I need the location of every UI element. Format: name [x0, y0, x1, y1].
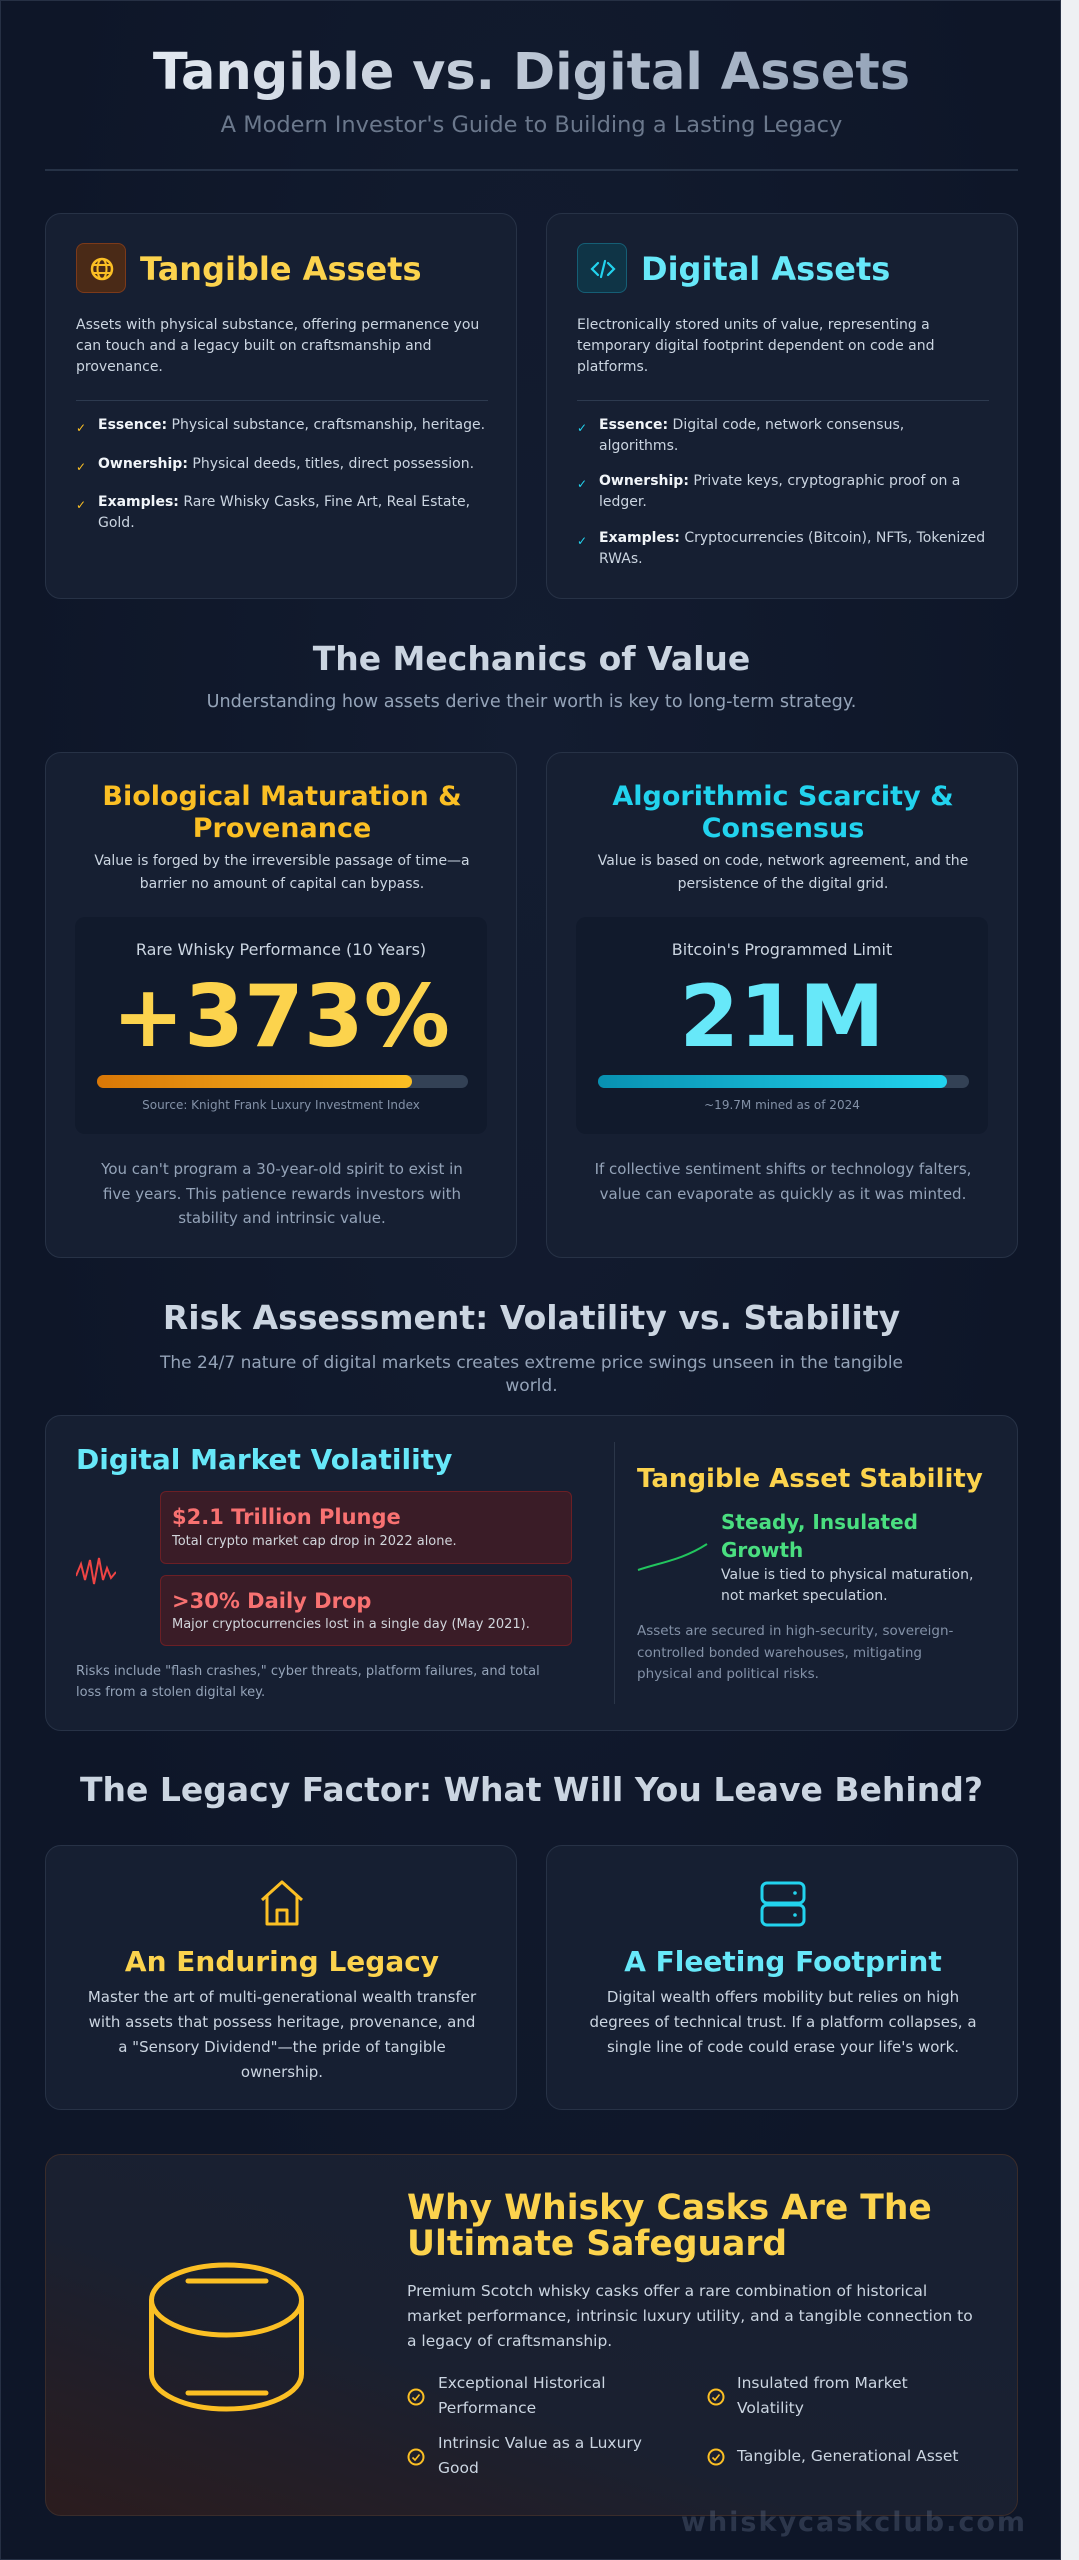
security text: controlled bonded warehouses, mitigating: [637, 1644, 922, 1660]
stat box: +373%: Source: Knight Frank Luxury Investment Index: [142, 1098, 420, 1112]
item: luxury good: Good: [438, 2459, 479, 2477]
bullet: essence: algorithms.: [599, 438, 678, 454]
progress bar: [598, 1075, 969, 1088]
description: persistence of the digital grid.: [678, 876, 888, 892]
item: luxury good: [408, 2434, 642, 2477]
security text: [637, 1623, 953, 1682]
description: Value is based on code, network agreement, and the: [598, 853, 968, 869]
bullet: examples: ✓: [76, 498, 86, 512]
icon: code: [577, 243, 627, 293]
description: Value is forged by the irreversible passage of time—a: [94, 853, 470, 869]
icon: house: [261, 1880, 303, 1926]
progress bar: [97, 1075, 468, 1088]
watermark: whiskycaskclub.com: [681, 2507, 1027, 2538]
bullet: ownership: ✓: [577, 477, 587, 491]
checklist: [408, 2374, 958, 2477]
heading: An Enduring Legacy: [125, 1945, 439, 1978]
heading: A Fleeting Footprint: [624, 1945, 942, 1978]
description: Assets with physical substance, offering permanence you can touch and a legacy built on craftsmanship and provenance.: [76, 317, 479, 375]
panel: digital assets: [546, 213, 1018, 599]
heading: Consensus: [702, 813, 864, 844]
item: insulated: Volatility: [737, 2399, 804, 2417]
panel: why whisky casks: [45, 2154, 1018, 2516]
heading: [407, 2188, 932, 2264]
panel: biological maturation: [45, 752, 517, 1258]
stat: daily drop: [160, 1575, 572, 1646]
title: Tangible vs. Digital Assets: [153, 43, 910, 102]
description: Electronically stored units of value, representing a temporary digital footprint dependent on code and platforms.: [577, 317, 934, 375]
heading: [612, 781, 954, 844]
bullet: essence: Essence: Physical substance, craftsmanship, heritage.: [98, 417, 485, 433]
stat box: +373%: [75, 917, 487, 1134]
panel: risk: [45, 1415, 1018, 1731]
text: single line of code could erase your life's work.: [607, 2038, 959, 2056]
heading: risk: Risk Assessment: Volatility vs. Stability: [163, 1298, 900, 1337]
text: [88, 1988, 476, 2081]
text: degrees of technical trust. If a platform collapses, a: [589, 2013, 977, 2031]
item: historical performance: Exceptional Historical: [438, 2374, 606, 2392]
text: ownership.: [241, 2063, 323, 2081]
risks text: loss from a stolen digital key.: [76, 1685, 265, 1700]
heading: volatility: Digital Market Volatility: [76, 1443, 452, 1476]
growth title: Growth: [721, 1538, 803, 1562]
bullet: essence: Essence: Digital code, network consensus,: [599, 417, 904, 433]
heading: Provenance: [193, 813, 371, 844]
panel: algorithmic scarcity: [546, 752, 1018, 1258]
icon: cask: [149, 2262, 304, 2412]
subheading: risk: [160, 1353, 903, 1396]
stat box: 21M: 21M: [679, 967, 885, 1067]
security text: Assets are secured in high-security, sovereign-: [637, 1623, 953, 1639]
text: [589, 1988, 977, 2056]
icon: globe: [76, 243, 126, 293]
subheading: mechanics: Understanding how assets derive their worth is key to long-term strategy.: [207, 692, 856, 712]
stat box: +373%: +373%: [112, 967, 450, 1067]
growth title: [721, 1510, 918, 1562]
heading: [102, 781, 462, 844]
panel: fleeting footprint: [546, 1845, 1018, 2110]
stat: plunge: [160, 1491, 572, 1564]
subheading: risk: The 24/7 nature of digital markets creates extreme price swings unseen in the tangible: [160, 1353, 903, 1373]
panel: enduring legacy: [45, 1845, 517, 2110]
bullet: essence: [577, 417, 904, 454]
stat: plunge: Total crypto market cap drop in 2022 alone.: [172, 1534, 457, 1549]
description: Premium Scotch whisky casks offer a rare combination of historical market performance, intrinsic luxury utility, and a tangible connection to a legacy of craftsmanship.: [407, 2282, 973, 2350]
footer text: value can evaporate as quickly as it was minted.: [600, 1184, 966, 1202]
footer text: [595, 1160, 971, 1202]
icon: server: [760, 1882, 806, 1926]
stat: plunge: $2.1 Trillion Plunge: [172, 1505, 401, 1529]
subtitle: A Modern Investor's Guide to Building a Lasting Legacy: [221, 112, 842, 138]
text: Master the art of multi-generational wealth transfer: [88, 1988, 476, 2006]
growth text: Value is tied to physical maturation, not market speculation.: [721, 1567, 973, 1604]
bullet: ownership: Ownership: Private keys, cryptographic proof on a ledger.: [599, 473, 960, 510]
footer text: stability and intrinsic value.: [178, 1209, 386, 1227]
bullet: ownership: Ownership: Physical deeds, titles, direct possession.: [98, 456, 474, 472]
stat box: +373%: Rare Whisky Performance (10 Years): [136, 940, 426, 959]
item: insulated: [708, 2374, 908, 2417]
footer text: [101, 1160, 463, 1227]
risks text: [76, 1664, 540, 1700]
footer text: You can't program a 30-year-old spirit to exist in: [101, 1160, 463, 1178]
text: Digital wealth offers mobility but relies on high: [607, 1988, 959, 2006]
stat box: 21M: [576, 917, 988, 1134]
item: historical performance: [408, 2374, 606, 2417]
description: barrier no amount of capital can bypass.: [140, 876, 424, 892]
item: generational asset: Tangible, Generational Asset: [737, 2447, 958, 2465]
item: historical performance: Performance: [438, 2399, 536, 2417]
heading: Digital Assets: [641, 250, 890, 288]
bullet: ownership: ✓: [76, 460, 86, 474]
heading: legacy: The Legacy Factor: What Will You Leave Behind?: [80, 1770, 983, 1809]
heading: Biological Maturation &: [102, 781, 462, 812]
growth title: Steady, Insulated: [721, 1510, 918, 1534]
heading: Algorithmic Scarcity &: [612, 781, 954, 812]
security text: physical and political risks.: [637, 1666, 819, 1682]
stat: daily drop: Major cryptocurrencies lost in a single day (May 2021).: [172, 1617, 530, 1632]
footer text: five years. This patience rewards investors with: [103, 1184, 461, 1202]
panel: tangible assets: [45, 213, 517, 599]
description: [94, 853, 470, 892]
bullet: examples: Examples: Rare Whisky Casks, Fine Art, Real Estate, Gold.: [98, 494, 470, 531]
bullet: essence: ✓: [577, 421, 587, 435]
icon: volatility wave: [76, 1558, 116, 1584]
icon: growth line: [638, 1543, 708, 1571]
heading: Tangible Assets: [140, 250, 422, 288]
subheading: risk: world.: [505, 1376, 558, 1396]
heading: mechanics: The Mechanics of Value: [313, 639, 750, 678]
footer text: If collective sentiment shifts or technology falters,: [595, 1160, 971, 1178]
bullet: examples: ✓: [577, 534, 587, 548]
risks text: Risks include "flash crashes," cyber threats, platform failures, and total: [76, 1664, 540, 1679]
heading: Ultimate Safeguard: [407, 2224, 787, 2264]
text: with assets that possess heritage, provenance, and: [89, 2013, 475, 2031]
item: luxury good: Intrinsic Value as a Luxury: [438, 2434, 642, 2452]
stat box: 21M: Bitcoin's Programmed Limit: [672, 940, 892, 959]
stat box: 21M: ~19.7M mined as of 2024: [704, 1098, 860, 1112]
stat: daily drop: >30% Daily Drop: [172, 1589, 371, 1613]
bullet: examples: Examples: Cryptocurrencies (Bitcoin), NFTs, Tokenized RWAs.: [599, 530, 985, 567]
item: insulated: Insulated from Market: [737, 2374, 908, 2392]
heading: stability: Tangible Asset Stability: [637, 1464, 983, 1494]
bullet: essence: ✓: [76, 421, 86, 435]
description: [598, 853, 968, 892]
heading: Why Whisky Casks Are The: [407, 2188, 932, 2228]
text: a "Sensory Dividend"—the pride of tangible: [118, 2038, 446, 2056]
